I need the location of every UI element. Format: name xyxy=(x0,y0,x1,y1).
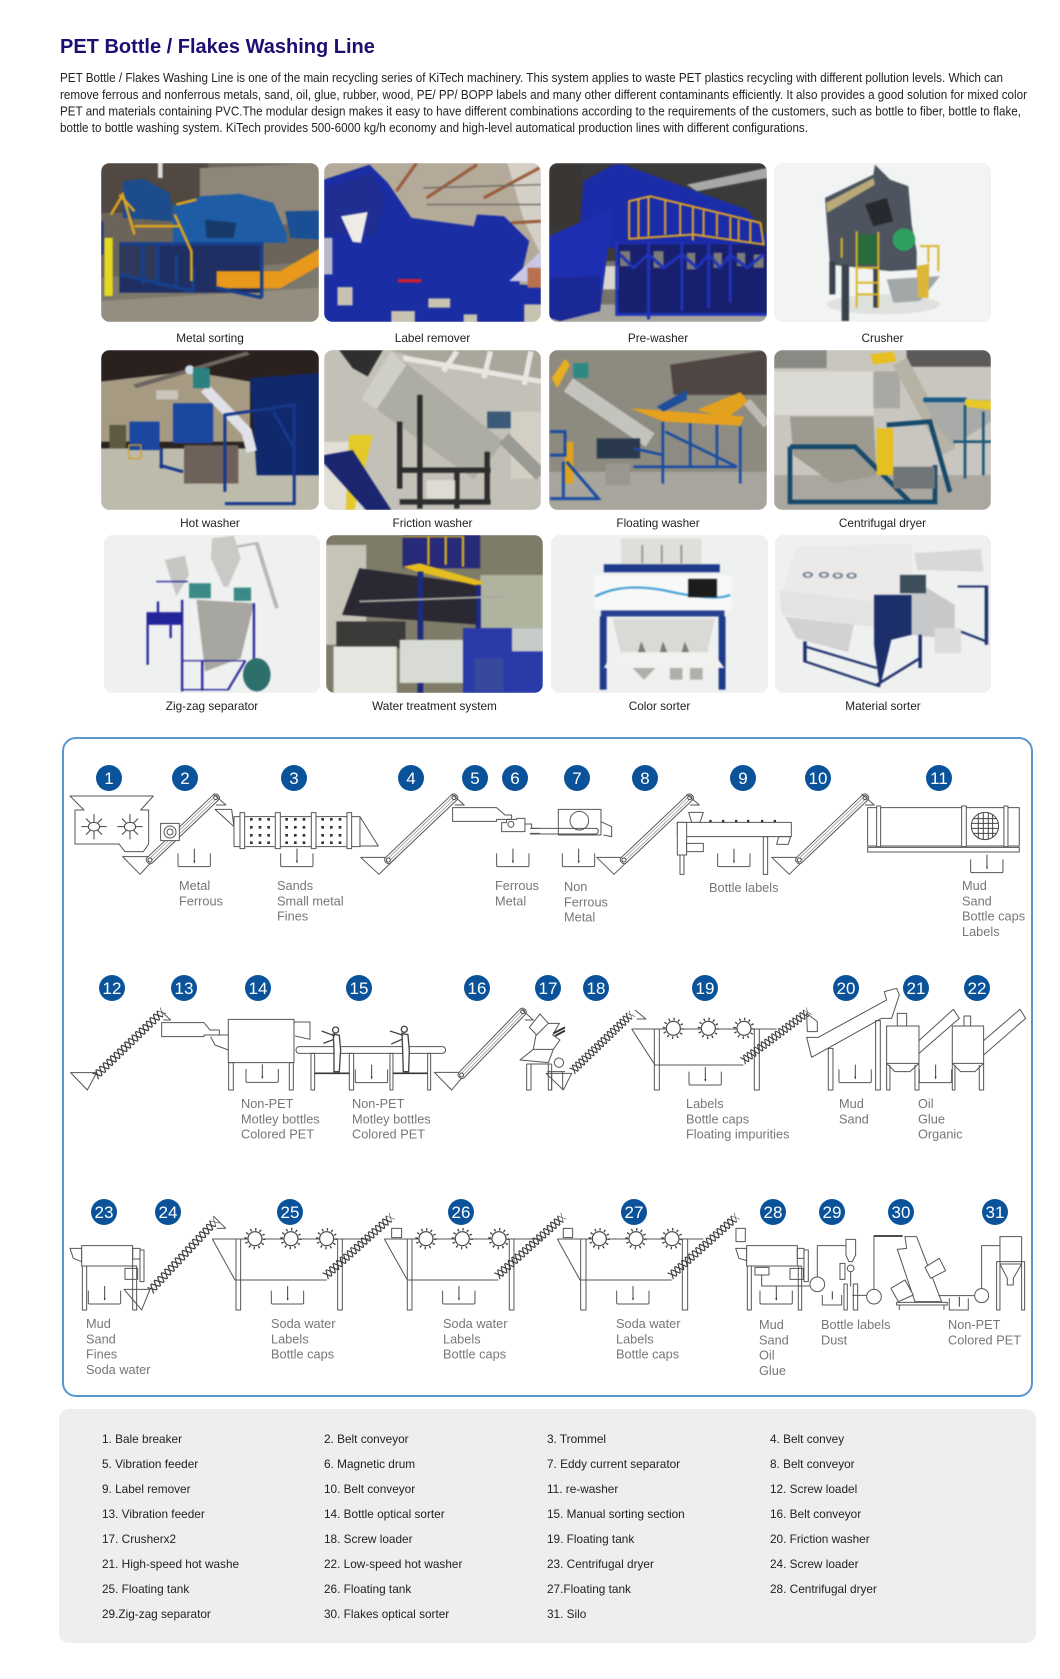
waste label: soda water, labels, bottle caps: Labels xyxy=(443,1331,481,1346)
station 23: centrifugal dryer xyxy=(70,1199,151,1377)
station 16: belt conveyor xyxy=(434,975,533,1090)
badge 26 xyxy=(448,1199,474,1225)
station 15: manual sorting section xyxy=(296,975,446,1142)
icon: floating tank xyxy=(212,1217,402,1310)
station 12: screw loader xyxy=(71,975,171,1090)
legend column 4: 12. Screw loadel xyxy=(770,1482,857,1496)
badge 7: 7 xyxy=(572,769,582,788)
icon: vibration feeder xyxy=(162,1023,228,1050)
station 2: belt conveyor xyxy=(123,765,226,908)
legend column 2: 14. Bottle optical sorter xyxy=(324,1507,445,1521)
station 5: vibration feeder xyxy=(453,765,512,821)
icon: floating tank xyxy=(384,1217,573,1310)
badge 10: 10 xyxy=(809,769,827,788)
badge 13: 13 xyxy=(175,979,193,998)
badge 25 xyxy=(277,1199,303,1225)
waste label: non-pet, motley bottles, colored pet: Colored PET xyxy=(352,1127,425,1142)
waste label: mud, sand, bottle caps, labels: Sand xyxy=(962,893,992,908)
caption: hot washer: Hot washer xyxy=(180,516,240,530)
waste label: ferrous metal: Ferrous xyxy=(495,878,539,893)
icon: belt conveyor xyxy=(597,793,699,874)
title: PET Bottle / Flakes Washing Line xyxy=(60,36,375,58)
badge 17: 17 xyxy=(539,979,557,998)
caption: zig-zag separator: Zig-zag separator xyxy=(166,699,258,713)
waste label: mud, sand, bottle caps, labels: Mud xyxy=(962,878,987,893)
icon: belt conveyor with magnet xyxy=(123,793,226,874)
waste label: non-pet, motley bottles, colored pet: Motley bottles xyxy=(352,1111,431,1126)
waste label: mud, sand, bottle caps, labels: Bottle caps xyxy=(962,909,1025,924)
legend column 4: 16. Belt conveyor xyxy=(770,1507,861,1521)
icon: belt conveyor xyxy=(434,1007,533,1090)
caption: pre-washer: Pre-washer xyxy=(628,331,688,345)
icon: bottle optical sorter xyxy=(228,1019,310,1090)
waste label: mud, sand, fines, soda water: Fines xyxy=(86,1347,117,1362)
waste label: non-pet, motley bottles, colored pet: Non-PET xyxy=(352,1096,404,1111)
station 29: zig-zag separator xyxy=(810,1199,890,1347)
intro paragraph xyxy=(60,71,1027,135)
station 18: screw loader xyxy=(546,975,646,1090)
caption: floating washer: Floating washer xyxy=(616,516,700,530)
badge 3 xyxy=(281,765,307,791)
icon: flakes optical sorter xyxy=(852,1236,947,1310)
legend column 3: 11. re-washer xyxy=(547,1482,618,1496)
station 14: bottle optical sorter xyxy=(228,975,320,1142)
station 27: floating tank xyxy=(557,1199,745,1362)
badge 31: 31 xyxy=(986,1203,1004,1222)
icon: screw loader xyxy=(71,1012,171,1090)
legend column 4: 20. Friction washer xyxy=(770,1532,870,1546)
icon: vibration feeder xyxy=(453,808,512,821)
legend column 1: 21. High-speed hot washe xyxy=(102,1557,239,1571)
icon: screw loader xyxy=(124,1216,226,1310)
waste label: soda water, labels, bottle caps: Soda water xyxy=(271,1316,336,1331)
legend column 1: 9. Label remover xyxy=(102,1482,191,1496)
icon: belt conveyor xyxy=(772,793,874,874)
photo: hot washer xyxy=(101,350,319,510)
station 1: bale breaker xyxy=(70,765,153,852)
legend column 4 xyxy=(770,1432,877,1596)
badge 9: 9 xyxy=(738,769,748,788)
photo: zig-zag separator xyxy=(104,535,320,693)
photo: friction washer xyxy=(324,350,541,510)
icon: zig-zag separator xyxy=(810,1239,858,1310)
icon: label remover xyxy=(677,812,791,874)
waste label: sands, small metal, fines: Sands xyxy=(277,878,313,893)
icon: bale breaker xyxy=(70,796,153,852)
caption: color sorter: Color sorter xyxy=(629,699,690,713)
legend column 2: 30. Flakes optical sorter xyxy=(324,1607,449,1621)
badge 20: 20 xyxy=(837,979,855,998)
waste label: bottle labels, dust: Dust xyxy=(821,1332,848,1347)
photo: crusher xyxy=(774,163,991,322)
waste label: non ferrous metal: Metal xyxy=(564,910,595,925)
badge 24: 24 xyxy=(159,1203,177,1222)
intro paragraph: PET Bottle / Flakes Washing Line is one of the main recycling series of KiTech machinery. This system applies to waste PET plastics recycling with different pollution levels. Which can xyxy=(60,71,1003,85)
badge 11 xyxy=(926,765,952,791)
station 31: silo xyxy=(938,1199,1025,1347)
waste label: mud, sand: Mud xyxy=(839,1096,864,1111)
station 25: floating tank xyxy=(212,1199,402,1362)
station 24: screw loader xyxy=(124,1199,226,1310)
badge 12: 12 xyxy=(103,979,121,998)
badge 1: 1 xyxy=(104,769,114,788)
panel: process flow stations xyxy=(62,737,1033,1397)
icon: manual sorting with workers xyxy=(296,1026,446,1090)
legend column 2: 22. Low-speed hot washer xyxy=(324,1557,462,1571)
legend column 3: 19. Floating tank xyxy=(547,1532,634,1546)
waste label: non-pet, motley bottles, colored pet: Motley bottles xyxy=(241,1111,320,1126)
legend column 4: 28. Centrifugal dryer xyxy=(770,1582,877,1596)
photo: color sorter xyxy=(551,535,768,693)
icon: centrifugal dryer xyxy=(736,1246,810,1310)
badge 27 xyxy=(621,1199,647,1225)
caption: water treatment system: Water treatment system xyxy=(372,699,497,713)
legend column 2: 2. Belt conveyor xyxy=(324,1432,409,1446)
badge 23: 23 xyxy=(95,1203,113,1222)
waste label: sands, small metal, fines: Small metal xyxy=(277,893,344,908)
waste label: ferrous metal: Metal xyxy=(495,893,526,908)
waste label: mud, sand, oil, glue: Mud xyxy=(759,1317,784,1332)
icon: trommel xyxy=(215,809,378,867)
badge 20 xyxy=(833,975,859,1001)
badge 15 xyxy=(346,975,372,1001)
badge 25: 25 xyxy=(281,1203,299,1222)
waste label: mud, sand, fines, soda water: Soda water xyxy=(86,1362,151,1377)
badge 11: 11 xyxy=(930,769,948,788)
badge 19: 19 xyxy=(696,979,714,998)
caption: metal sorting: Metal sorting xyxy=(176,331,244,345)
legend column 3: 23. Centrifugal dryer xyxy=(547,1557,654,1571)
waste label: oil, glue, organic: Oil xyxy=(918,1096,934,1111)
station 8: belt conveyor xyxy=(597,765,699,874)
waste label: mud, sand, bottle caps, labels: Labels xyxy=(962,924,1000,939)
legend column 1 xyxy=(102,1432,239,1621)
caption: material sorter: Material sorter xyxy=(845,699,921,713)
station 11: pre-washer xyxy=(868,765,1025,939)
badge 7 xyxy=(564,765,590,791)
waste label: non-pet, motley bottles, colored pet: Non-PET xyxy=(241,1096,293,1111)
photo: pre-washer xyxy=(549,163,767,322)
icon: screw loader xyxy=(546,1010,646,1090)
badge 5: 5 xyxy=(470,769,480,788)
badge 27: 27 xyxy=(625,1203,643,1222)
photo: metal sorting xyxy=(101,163,319,322)
waste label: bottle labels: Bottle labels xyxy=(709,880,778,895)
icon: high-speed hot washer xyxy=(887,1009,959,1090)
legend column 4: 24. Screw loader xyxy=(770,1557,859,1571)
legend column 2: 26. Floating tank xyxy=(324,1582,411,1596)
badge 19 xyxy=(692,975,718,1001)
panel: equipment legend xyxy=(59,1409,1036,1643)
caption: centrifugal dryer: Centrifugal dryer xyxy=(839,516,926,530)
badge 15: 15 xyxy=(350,979,368,998)
badge 22: 22 xyxy=(968,979,986,998)
waste label: soda water, labels, bottle caps: Soda water xyxy=(443,1316,508,1331)
waste label: soda water, labels, bottle caps: Bottle caps xyxy=(271,1347,334,1362)
station 9: label remover xyxy=(677,765,791,895)
icon: floating tank xyxy=(557,1217,745,1310)
legend column 3 xyxy=(547,1432,685,1621)
badge 3: 3 xyxy=(289,769,299,788)
waste label: soda water, labels, bottle caps: Soda water xyxy=(616,1316,680,1331)
waste label: mud, sand, oil, glue: Sand xyxy=(759,1332,789,1347)
waste label: non ferrous metal: Ferrous xyxy=(564,894,608,909)
waste label: mud, sand, fines, soda water: Sand xyxy=(86,1331,116,1346)
photo: centrifugal dryer xyxy=(774,350,991,510)
legend column 3: 15. Manual sorting section xyxy=(547,1507,685,1521)
badge 2 xyxy=(172,765,198,791)
station 4: belt conveyor xyxy=(361,765,464,874)
waste label: mud, sand, oil, glue: Glue xyxy=(759,1363,786,1378)
badge 14 xyxy=(245,975,271,1001)
badge 6: 6 xyxy=(510,769,520,788)
waste label: oil, glue, organic: Organic xyxy=(918,1127,963,1142)
photo: material sorter xyxy=(775,535,991,693)
badge 26: 26 xyxy=(452,1203,470,1222)
station 21: high-speed hot washer xyxy=(887,975,963,1142)
station 30: flakes optical sorter xyxy=(852,1199,947,1310)
legend column 1: 17. Crusherx2 xyxy=(102,1532,176,1546)
station 17: crusher xyxy=(520,975,565,1090)
waste label: soda water, labels, bottle caps: Bottle caps xyxy=(443,1347,506,1362)
legend column 2 xyxy=(324,1432,462,1621)
station 19: floating tank xyxy=(632,975,817,1142)
legend column 2: 6. Magnetic drum xyxy=(324,1457,415,1471)
legend column 2: 18. Screw loader xyxy=(324,1532,413,1546)
waste label: non-pet, motley bottles, colored pet: Colored PET xyxy=(241,1127,314,1142)
badge 23 xyxy=(91,1199,117,1225)
icon: low-speed hot washer xyxy=(952,1009,1026,1090)
icon: crusher xyxy=(520,1014,565,1090)
icon: pre-washer xyxy=(868,806,1019,873)
waste label: mud, sand: Sand xyxy=(839,1111,869,1126)
badge 4: 4 xyxy=(406,769,416,788)
icon: silo with blower xyxy=(938,1237,1025,1310)
waste label: labels, bottle caps, floating impurities: Bottle caps xyxy=(686,1111,749,1126)
icon: belt conveyor xyxy=(361,793,464,874)
legend column 1: 29.Zig-zag separator xyxy=(102,1607,211,1621)
waste label: metal, ferrous: Metal xyxy=(179,878,210,893)
icon: friction washer xyxy=(807,988,899,1090)
waste label: oil, glue, organic: Glue xyxy=(918,1111,945,1126)
station 6: magnetic drum xyxy=(495,765,540,908)
badge 28: 28 xyxy=(764,1203,782,1222)
badge 16: 16 xyxy=(468,979,486,998)
legend column 4: 4. Belt convey xyxy=(770,1432,844,1446)
legend column 2: 10. Belt conveyor xyxy=(324,1482,415,1496)
station 28: centrifugal dryer xyxy=(736,1199,810,1378)
station 3: trommel xyxy=(215,765,378,924)
waste label: soda water, labels, bottle caps: Labels xyxy=(616,1331,654,1346)
caption: crusher: Crusher xyxy=(862,331,903,345)
station 10: belt conveyor xyxy=(772,765,874,874)
badge 14: 14 xyxy=(249,979,267,998)
legend column 3: 7. Eddy current separator xyxy=(547,1457,680,1471)
badge 21 xyxy=(903,975,929,1001)
intro paragraph: bottle to bottle washing system. KiTech provides 500-6000 kg/h economy and high-level automatical production lines with different configurations. xyxy=(60,121,808,135)
photo: water treatment system xyxy=(326,535,543,693)
caption: friction washer: Friction washer xyxy=(392,516,472,530)
badge 31 xyxy=(982,1199,1008,1225)
legend column 3: 31. Silo xyxy=(547,1607,586,1621)
waste label: metal, ferrous: Ferrous xyxy=(179,893,223,908)
station 13: vibration feeder xyxy=(162,975,228,1050)
station 22: low-speed hot washer xyxy=(952,975,1026,1090)
caption: label remover: Label remover xyxy=(395,331,470,345)
waste label: mud, sand, fines, soda water: Mud xyxy=(86,1316,111,1331)
legend column 3: 3. Trommel xyxy=(547,1432,606,1446)
station 7: eddy current separator xyxy=(530,765,612,925)
waste label: soda water, labels, bottle caps: Labels xyxy=(271,1331,309,1346)
badge 29: 29 xyxy=(823,1203,841,1222)
waste label: non-pet, colored pet: Non-PET xyxy=(948,1317,1000,1332)
badge 29 xyxy=(819,1199,845,1225)
photo: label remover xyxy=(324,163,541,322)
legend column 1: 1. Bale breaker xyxy=(102,1432,182,1446)
badge 6 xyxy=(502,765,528,791)
legend column 3: 27.Floating tank xyxy=(547,1582,631,1596)
badge 2: 2 xyxy=(180,769,190,788)
legend column 1: 5. Vibration feeder xyxy=(102,1457,198,1471)
station 26: floating tank xyxy=(384,1199,573,1362)
icon: eddy current separator xyxy=(530,809,612,867)
icon: centrifugal dryer xyxy=(70,1246,144,1310)
icon: magnetic drum xyxy=(497,818,540,867)
waste label: soda water, labels, bottle caps: Bottle caps xyxy=(616,1347,679,1362)
icon: floating tank xyxy=(632,1012,817,1090)
waste label: labels, bottle caps, floating impurities: Labels xyxy=(686,1096,724,1111)
waste label: mud, sand, oil, glue: Oil xyxy=(759,1348,775,1363)
waste label: labels, bottle caps, floating impurities: Floating impurities xyxy=(686,1127,789,1142)
badge 28 xyxy=(760,1199,786,1225)
badge 8: 8 xyxy=(640,769,650,788)
legend column 1: 13. Vibration feeder xyxy=(102,1507,205,1521)
waste label: bottle labels, dust: Bottle labels xyxy=(821,1317,890,1332)
photo: floating washer xyxy=(549,350,767,510)
badge 30: 30 xyxy=(892,1203,910,1222)
waste label: sands, small metal, fines: Fines xyxy=(277,909,308,924)
legend column 4: 8. Belt conveyor xyxy=(770,1457,855,1471)
legend column 1: 25. Floating tank xyxy=(102,1582,189,1596)
station 20: friction washer xyxy=(807,975,899,1126)
waste label: non ferrous metal: Non xyxy=(564,879,587,894)
waste label: non-pet, colored pet: Colored PET xyxy=(948,1332,1021,1347)
badge 18: 18 xyxy=(587,979,605,998)
badge 21: 21 xyxy=(907,979,925,998)
